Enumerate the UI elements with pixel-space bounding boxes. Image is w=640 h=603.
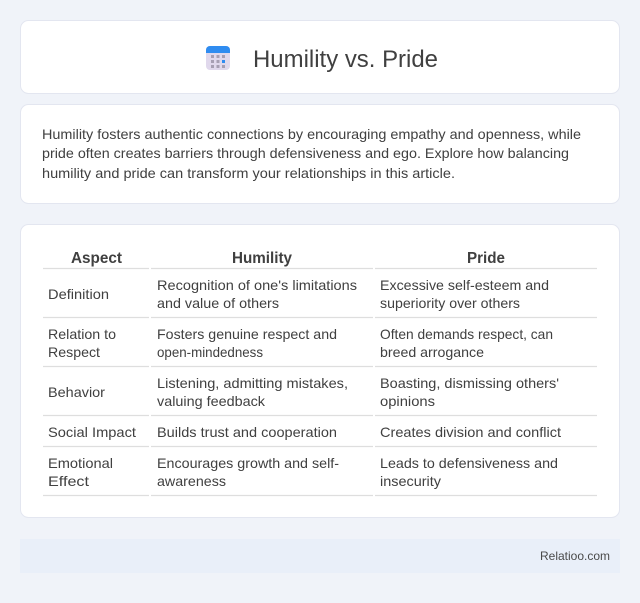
row: emotional effect: insecurity (380, 473, 441, 489)
row: emotional effect: Emotional (48, 455, 113, 471)
row: relation to respect (48, 326, 553, 360)
icon: calendar (206, 46, 230, 70)
row: relation to respect: Fosters genuine respect and (157, 326, 337, 342)
row: relation to respect: Often demands respect, can (380, 326, 553, 342)
panel: comparison table (20, 224, 620, 518)
row: behavior: valuing feedback (157, 393, 266, 409)
row: definition: Excessive self-esteem and (380, 277, 549, 293)
row: emotional effect: Effect (48, 473, 89, 489)
intro text: humility and pride can transform your relationships in this article. (42, 165, 455, 181)
row: behavior: Listening, admitting mistakes, (157, 375, 348, 391)
row: social impact (48, 424, 561, 440)
row: emotional effect: Encourages growth and self- (157, 455, 339, 471)
row: emotional effect (48, 455, 558, 489)
table header (71, 250, 505, 267)
row: social impact: Social Impact (48, 424, 136, 440)
row: social impact: Creates division and conflict (380, 424, 561, 440)
footer text: Relatioo.com (540, 549, 610, 563)
row: social impact: Builds trust and cooperation (157, 424, 337, 440)
row: behavior: opinions (380, 393, 435, 409)
row: definition: Recognition of one's limitations (157, 277, 357, 293)
panel: intro (20, 104, 620, 204)
row: definition: Definition (48, 286, 109, 302)
row: relation to respect: breed arrogance (380, 344, 484, 360)
row: behavior: Behavior (48, 384, 105, 400)
row: behavior: Boasting, dismissing others' (380, 375, 559, 391)
row: relation to respect: open-mindedness (157, 344, 263, 360)
intro text: pride often creates barriers through defensiveness and ego. Explore how balancing (42, 145, 569, 161)
intro text: Humility fosters authentic connections by encouraging empathy and openness, while (42, 126, 581, 142)
row: definition (48, 277, 549, 311)
title: Humility vs. Pride (253, 46, 438, 73)
table header: Humility (232, 250, 292, 267)
row: behavior (48, 375, 559, 409)
row: definition: and value of others (157, 295, 279, 311)
row: emotional effect: awareness (157, 473, 226, 489)
row: definition: superiority over others (380, 295, 520, 311)
row: emotional effect: Leads to defensiveness and (380, 455, 558, 471)
table header: Aspect (71, 250, 123, 267)
intro text (42, 126, 581, 181)
row: relation to respect: Respect (48, 344, 100, 360)
footer bar (20, 539, 620, 573)
table header: Pride (467, 250, 505, 267)
title panel (20, 20, 620, 94)
row: relation to respect: Relation to (48, 326, 116, 342)
